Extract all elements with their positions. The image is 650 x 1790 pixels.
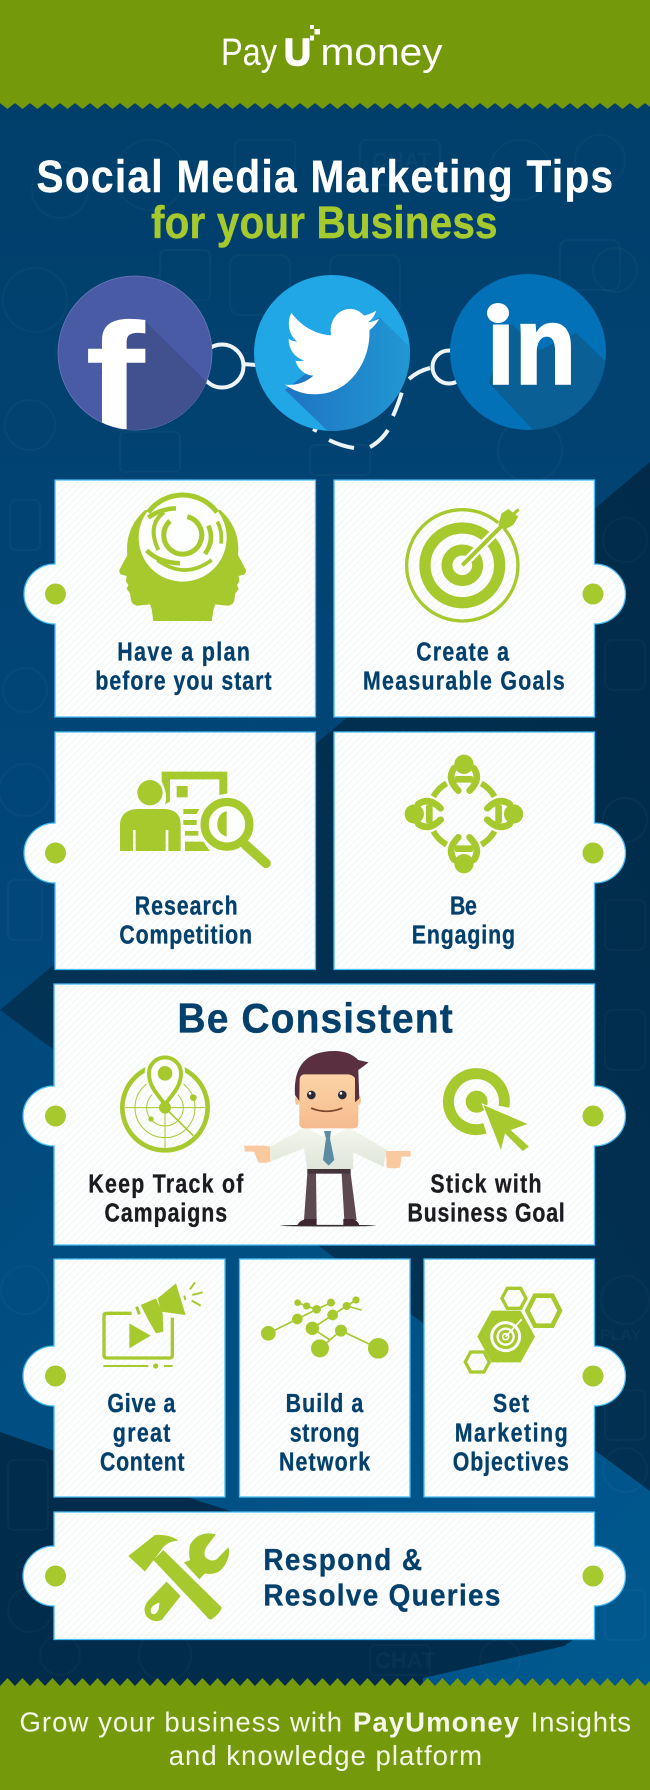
text: stick with business goal [408, 1170, 565, 1228]
text: give a great content: great [113, 1419, 170, 1448]
text: measurable goals [363, 638, 565, 696]
panel: have a plan [24, 480, 316, 717]
text: research competition: Research [135, 891, 238, 921]
icon: network nodes [261, 1296, 389, 1359]
text: stick with business goal: Business Goal [408, 1199, 565, 1228]
logo: PayUmoney: money [320, 32, 442, 74]
icon: linkedin [450, 274, 606, 430]
background: dark blue with diagonal facets: CHAT [375, 1648, 435, 1673]
panel: research competition [24, 732, 316, 970]
background: dark blue with diagonal facets: CHAT [372, 148, 432, 173]
text: set marketing objectives: Objectives [453, 1447, 569, 1477]
text: keep track of campaigns: Keep Track of [88, 1170, 243, 1199]
text: set marketing objectives: Marketing [455, 1419, 568, 1448]
text: give a great content: Content [100, 1447, 185, 1477]
text: research competition [119, 891, 252, 950]
text: respond and resolve queries: Resolve Queries [263, 1578, 500, 1613]
text: footer message: Grow your business with [20, 1706, 342, 1737]
text: keep track of campaigns [88, 1170, 243, 1228]
text: be engaging [412, 891, 515, 950]
text: respond and resolve queries: Respond & [263, 1543, 422, 1578]
logo: PayUmoney [221, 25, 442, 74]
title: for your Business [151, 198, 498, 249]
text: give a great content: Give a [107, 1389, 176, 1418]
text: give a great content [100, 1389, 185, 1477]
text: build a strong network: Build a [286, 1389, 364, 1418]
text: measurable goals: Create a [416, 638, 510, 667]
panel: be consistent [23, 984, 626, 1245]
text: set marketing objectives: Set [493, 1389, 529, 1418]
text: build a strong network [279, 1389, 371, 1477]
icon: hammer and wrench [128, 1533, 229, 1621]
text: measurable goals: Measurable Goals [363, 666, 565, 696]
title [37, 152, 613, 249]
text: set marketing objectives [453, 1389, 569, 1477]
text: stick with business goal: Stick with [430, 1170, 542, 1199]
text: footer message: and knowledge platform [169, 1740, 482, 1771]
text: be engaging: Be [450, 891, 477, 921]
text: respond and resolve queries [263, 1543, 500, 1613]
text: have a plan [95, 638, 272, 696]
text: footer message [20, 1706, 631, 1771]
icon: cursor on target [448, 1074, 529, 1151]
panel: be engaging [334, 732, 626, 970]
text: build a strong network: Network [279, 1447, 371, 1477]
panel: marketing objectives [424, 1259, 626, 1497]
header band [0, 0, 650, 109]
icon: radar with location pin [122, 1057, 208, 1150]
logo: PayUmoney: Pay [221, 32, 277, 74]
icon: facebook [58, 276, 212, 430]
background: dark blue with diagonal facets: PLAY [600, 1327, 642, 1344]
text: be engaging: Engaging [412, 920, 515, 950]
icon: video screen with megaphone [103, 1282, 203, 1369]
text: footer message: PayUmoney [353, 1706, 520, 1737]
icon: people around a table [405, 755, 523, 873]
footer band [0, 1678, 650, 1790]
heading: be consistent: Be Consistent [177, 994, 453, 1042]
panel: great content [23, 1259, 225, 1497]
text: have a plan: before you start [95, 666, 272, 696]
icon: hexagons with target [465, 1288, 560, 1372]
icon: two heads with maze [119, 494, 246, 621]
icon: target with arrow [407, 509, 519, 621]
text: research competition: Competition [119, 920, 252, 950]
panel: respond and resolve [23, 1512, 626, 1640]
icon: linkedin: in [487, 284, 576, 408]
title: Social Media Marketing Tips [37, 152, 613, 203]
panel: measurable goals [334, 480, 626, 717]
text: keep track of campaigns: Campaigns [104, 1199, 227, 1228]
text: build a strong network: strong [290, 1419, 359, 1448]
icon: person with magnifier [120, 772, 266, 863]
text: have a plan: Have a plan [117, 638, 250, 667]
icon: twitter [254, 275, 415, 440]
icon: facebook: f [85, 292, 145, 462]
connectors between social icons [200, 344, 466, 448]
text: footer message: Insights [531, 1706, 631, 1737]
panel: strong network [240, 1259, 410, 1497]
logo: PayUmoney: U [284, 32, 311, 74]
illustration: businessman pointing both ways [244, 1051, 411, 1226]
